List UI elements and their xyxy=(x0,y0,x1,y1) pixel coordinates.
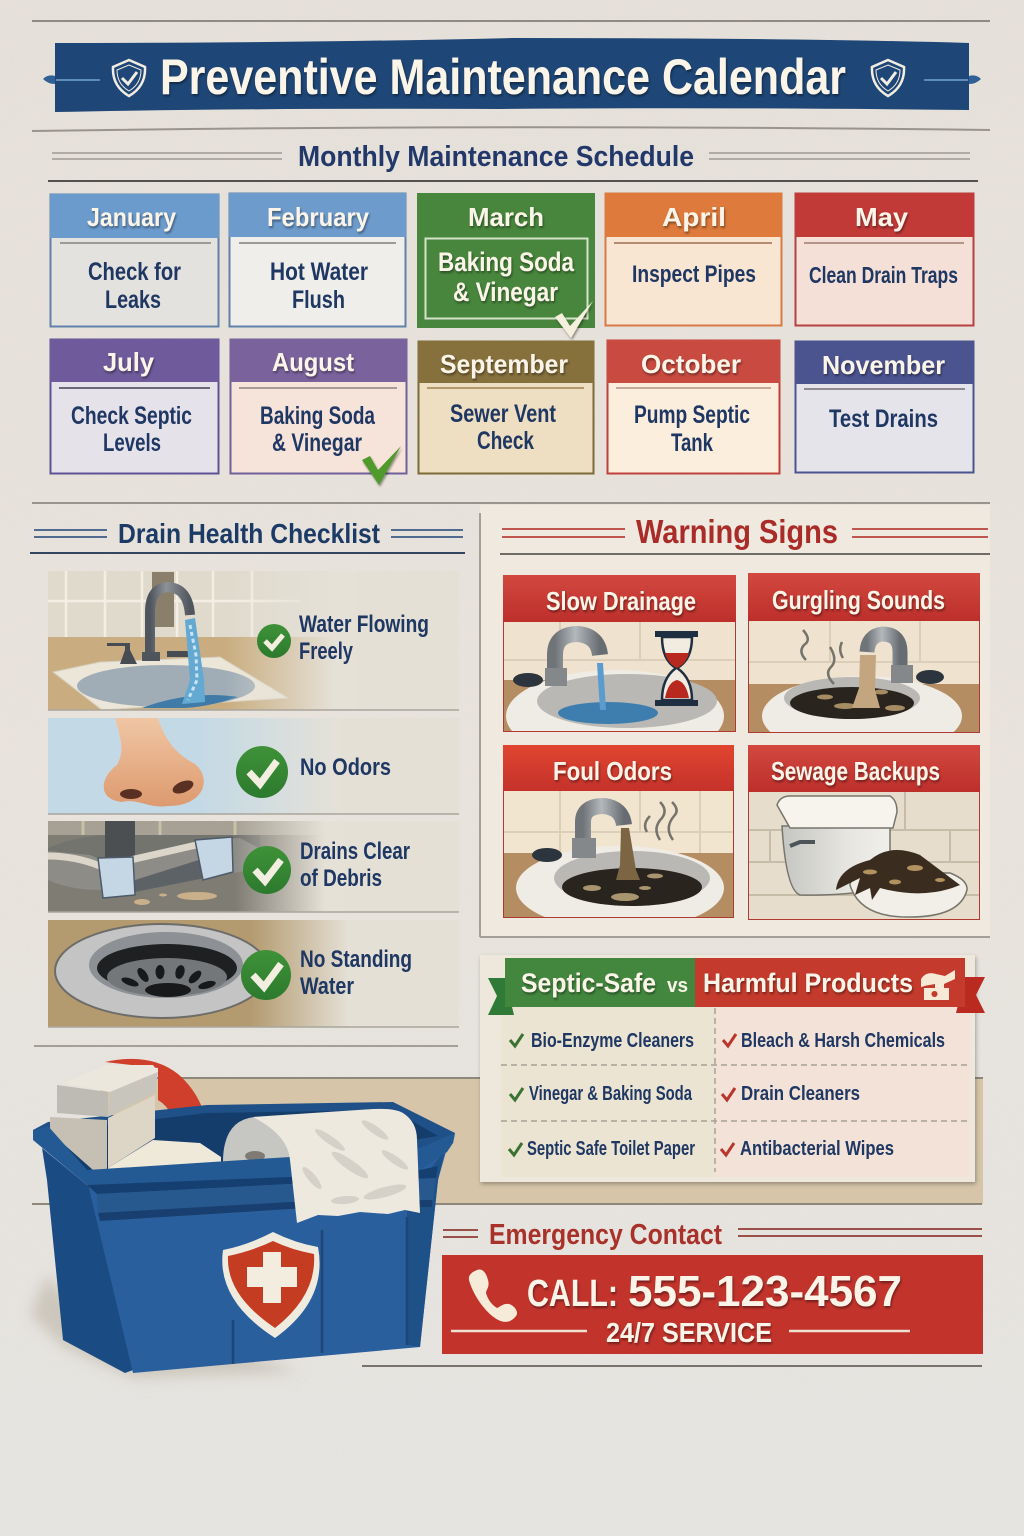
label: Gurgling Sounds xyxy=(772,585,945,615)
icon: white check mark xyxy=(555,301,593,338)
icon: phone xyxy=(469,1269,517,1322)
front rim xyxy=(33,1126,455,1185)
row: no odors xyxy=(48,718,459,814)
illustration: overflowing toilet xyxy=(749,792,979,919)
panel: warning signs xyxy=(480,505,990,937)
gray box xyxy=(50,1065,158,1170)
label: Slow Drainage xyxy=(546,586,696,616)
card: February: February xyxy=(267,202,369,232)
card: May: May xyxy=(855,202,909,232)
ribbon header: Septic-Safe xyxy=(521,968,656,998)
icon: left shield xyxy=(113,60,145,96)
list: harmful products: Antibacterial Wipes xyxy=(740,1138,894,1160)
card: gurgling sounds xyxy=(748,573,980,733)
title text: Preventive Maintenance Calendar xyxy=(160,49,846,105)
background band behind kit xyxy=(32,1078,983,1204)
panel: emergency contact xyxy=(442,1219,983,1354)
icon: check badge xyxy=(236,746,288,798)
ribbon header xyxy=(488,958,985,1015)
icon: check badge xyxy=(241,950,291,1000)
label: Drains Clear xyxy=(300,838,410,865)
card: slow drainage xyxy=(503,575,736,732)
card: January xyxy=(50,194,219,326)
card: April xyxy=(605,193,782,326)
list: septic-safe products: Vinegar & Baking Soda xyxy=(529,1083,693,1105)
card: September: Sewer Vent xyxy=(450,400,557,428)
paper roll end xyxy=(223,1117,290,1165)
phone number: 555-123-4567 xyxy=(628,1267,902,1316)
heading: emergency contact: Emergency Contact xyxy=(489,1219,722,1251)
card: August xyxy=(230,339,407,485)
card: November: November xyxy=(822,350,945,380)
card: July: Levels xyxy=(103,429,161,457)
label: Foul Odors xyxy=(553,756,672,786)
list: harmful products: Bleach & Harsh Chemicals xyxy=(741,1030,945,1052)
card: September xyxy=(418,341,594,474)
card: July: July xyxy=(103,347,155,377)
ribbon header: vs xyxy=(667,975,688,997)
card: April: Inspect Pipes xyxy=(632,261,756,288)
illustration: sink with running water xyxy=(48,571,324,710)
label: No Standing xyxy=(300,946,412,973)
label: Freely xyxy=(299,638,353,665)
bin interior and back rim xyxy=(33,1102,455,1183)
illustration: foul sink xyxy=(504,791,733,930)
illustration: gurgling sink xyxy=(749,621,979,732)
icon: pipe wrench xyxy=(921,970,955,1000)
heading: warning signs: Warning Signs xyxy=(636,513,838,550)
label: Sewage Backups xyxy=(771,756,940,786)
panel: drain health checklist xyxy=(30,518,465,1027)
icon: right shield xyxy=(872,60,904,96)
shield with cross xyxy=(222,1232,320,1338)
list: septic-safe products: Septic Safe Toilet Paper xyxy=(527,1138,695,1160)
card: September: September xyxy=(440,349,568,379)
card: October: Pump Septic xyxy=(634,401,750,429)
icon: check badge xyxy=(243,846,291,894)
illustration: nose xyxy=(48,718,302,814)
phone number: CALL: xyxy=(527,1273,618,1315)
card: foul odors xyxy=(503,745,734,930)
ribbon header: Harmful Products xyxy=(703,968,913,998)
list: harmful products: Drain Cleaners xyxy=(741,1083,860,1105)
label: Water Flowing xyxy=(299,611,429,638)
bin body xyxy=(33,1126,455,1373)
card: April: April xyxy=(662,202,726,232)
card: March: March xyxy=(468,202,544,232)
small roll xyxy=(108,1140,221,1175)
label: of Debris xyxy=(300,865,382,892)
row: drains clear of debris xyxy=(48,821,459,912)
row: no standing water xyxy=(48,920,459,1027)
card: November xyxy=(795,341,974,472)
card: November: Test Drains xyxy=(829,405,938,433)
card: August: Baking Soda xyxy=(260,402,376,430)
card: February xyxy=(229,193,406,326)
title banner xyxy=(43,38,981,112)
card: February: Hot Water xyxy=(270,258,368,286)
card: August: & Vinegar xyxy=(272,429,362,457)
card: October: October xyxy=(641,349,741,379)
calendar grid xyxy=(50,193,974,485)
card: July xyxy=(50,339,219,474)
label: Water xyxy=(300,973,354,1000)
icon: green check mark xyxy=(362,446,401,485)
card: sewage backups xyxy=(748,745,980,920)
illustration: floor drain xyxy=(48,920,350,1027)
card: March xyxy=(417,193,595,338)
heading: monthly maintenance schedule: Monthly Maintenance Schedule xyxy=(298,141,694,173)
row: water flowing freely xyxy=(48,571,459,712)
illustration: clean pipe xyxy=(48,821,345,912)
card: May: Clean Drain Traps xyxy=(809,262,958,288)
card: February: Flush xyxy=(292,286,345,314)
illustration: slow sink and hourglass xyxy=(504,622,735,731)
list: septic-safe products xyxy=(509,1030,695,1160)
red hose xyxy=(105,1059,210,1146)
panel: septic-safe vs harmful products xyxy=(480,955,985,1182)
list: septic-safe products: Bio-Enzyme Cleaners xyxy=(531,1030,694,1052)
card: September: Check xyxy=(477,427,534,455)
card: October xyxy=(607,340,780,474)
list: harmful products xyxy=(721,1030,945,1160)
icon: check badge xyxy=(257,624,291,658)
illustration: blue emergency kit bin xyxy=(30,1059,455,1378)
card: January: Check for xyxy=(88,258,181,286)
card: August: August xyxy=(272,347,354,377)
card: May xyxy=(795,193,974,326)
heading: drain health checklist: Drain Health Checklist xyxy=(118,518,380,549)
paper sheet xyxy=(253,1109,420,1223)
service hours: 24/7 SERVICE xyxy=(606,1317,772,1348)
card: October: Tank xyxy=(671,429,713,457)
card: January: Leaks xyxy=(105,286,161,314)
card: January: January xyxy=(87,202,176,232)
card: July: Check Septic xyxy=(71,402,192,430)
card: March: Baking Soda xyxy=(438,247,575,277)
card: March: & Vinegar xyxy=(453,277,558,307)
label: No Odors xyxy=(300,754,391,781)
